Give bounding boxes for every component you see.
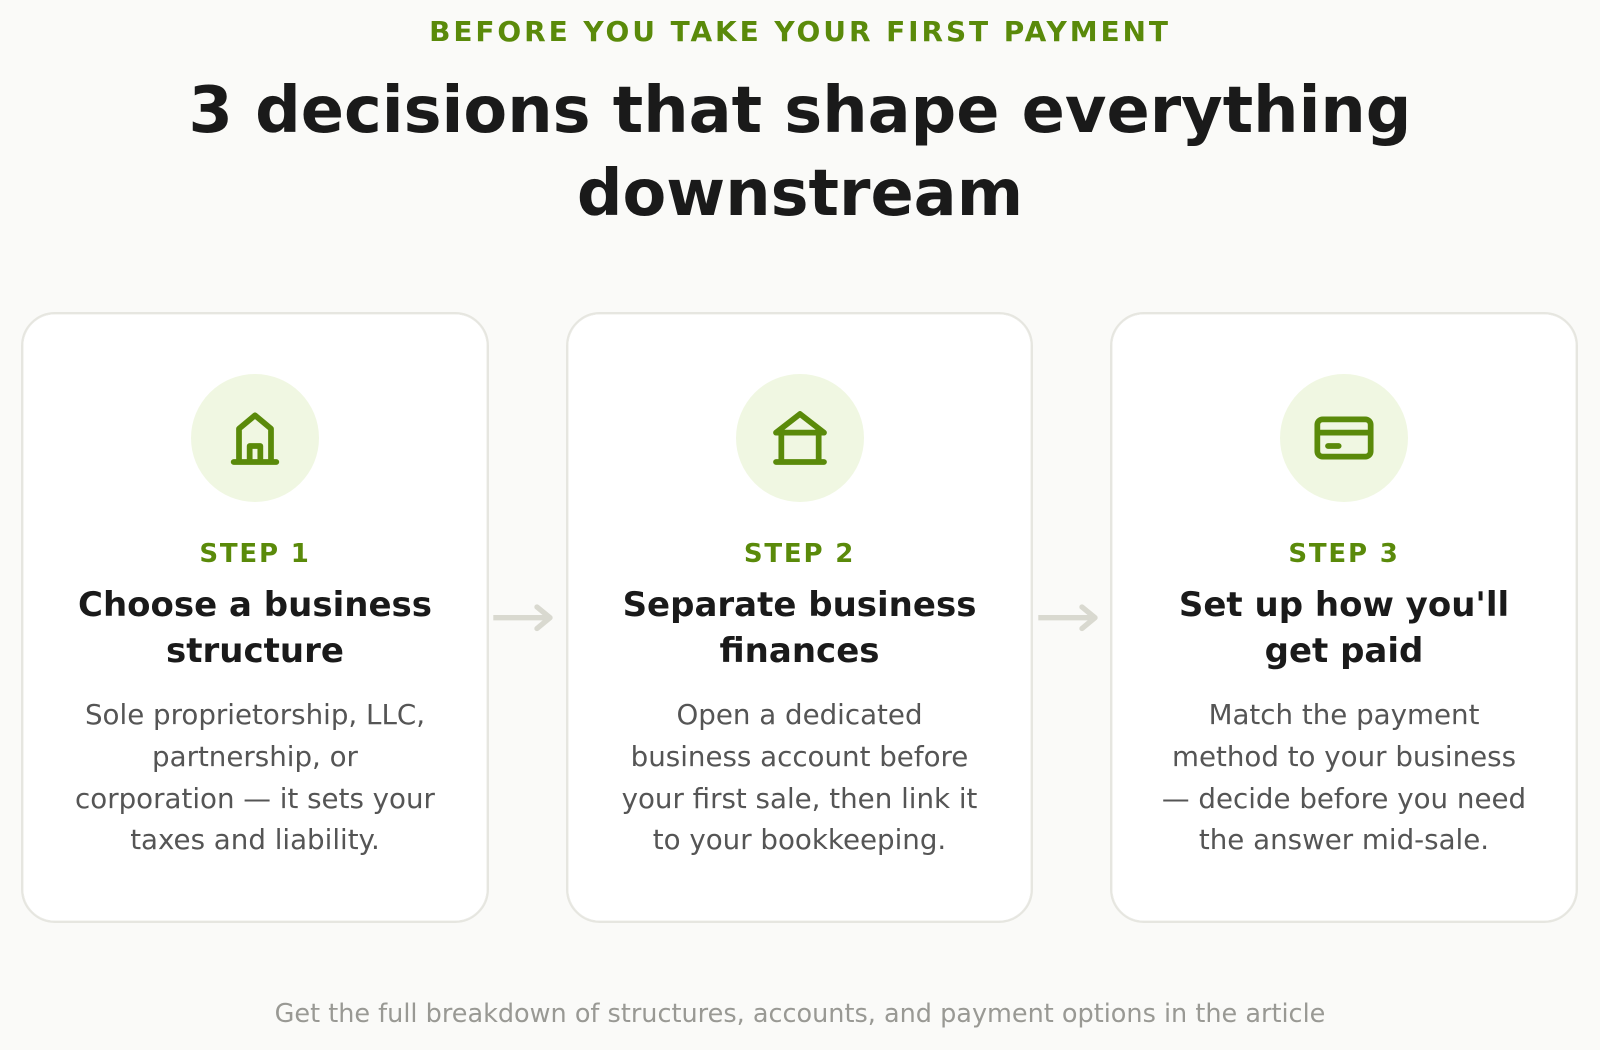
step 2 label: STEP 2 [744,539,855,569]
step 2 heading: finances [719,631,880,671]
step 3 description: method to your business [1172,740,1516,773]
icon: bank [736,374,864,502]
step 2 description [622,698,977,856]
step 1 heading [78,585,432,671]
step 2 description: business account before [631,740,968,773]
step 3 heading [1179,585,1509,671]
step 3 heading: Set up how you'll [1179,585,1509,625]
arrow: step 1 to step 2 [493,604,553,632]
step 2 description: Open a dedicated [676,698,923,731]
step 1 description: Sole proprietorship, LLC, [85,698,425,731]
step 3 description: — decide before you need [1162,782,1526,815]
step 3 description [1162,698,1526,856]
step 3 description: the answer mid-sale. [1199,823,1489,856]
step 1 heading: Choose a business [78,585,432,625]
arrow: step 2 to step 3 [1038,604,1098,632]
step 1 description [75,698,435,856]
panel: step 2 card [566,312,1033,923]
step 3 heading: get paid [1265,631,1423,671]
step 2 description: to your bookkeeping. [653,823,946,856]
panel: step 1 card [21,312,489,923]
eyebrow heading: BEFORE YOU TAKE YOUR FIRST PAYMENT [429,15,1171,48]
title: downstream [577,157,1023,231]
step 1 label: STEP 1 [199,539,311,569]
panel: step 3 card [1110,312,1578,923]
step 1 heading: structure [166,631,344,671]
title [189,74,1411,231]
step 1 description: taxes and liability. [130,823,380,856]
step 1 description: partnership, or [152,740,358,773]
icon: credit card [1280,374,1408,502]
step 3 description: Match the payment [1209,698,1479,731]
step 1 description: corporation — it sets your [75,782,435,815]
step 2 heading [623,585,976,671]
footer note: Get the full breakdown of structures, accounts, and payment options in the article [275,999,1325,1029]
step 3 label: STEP 3 [1288,539,1400,569]
title: 3 decisions that shape everything [189,74,1411,148]
step 2 heading: Separate business [623,585,976,625]
step 2 description: your first sale, then link it [622,782,977,815]
icon: storefront house [191,374,319,502]
